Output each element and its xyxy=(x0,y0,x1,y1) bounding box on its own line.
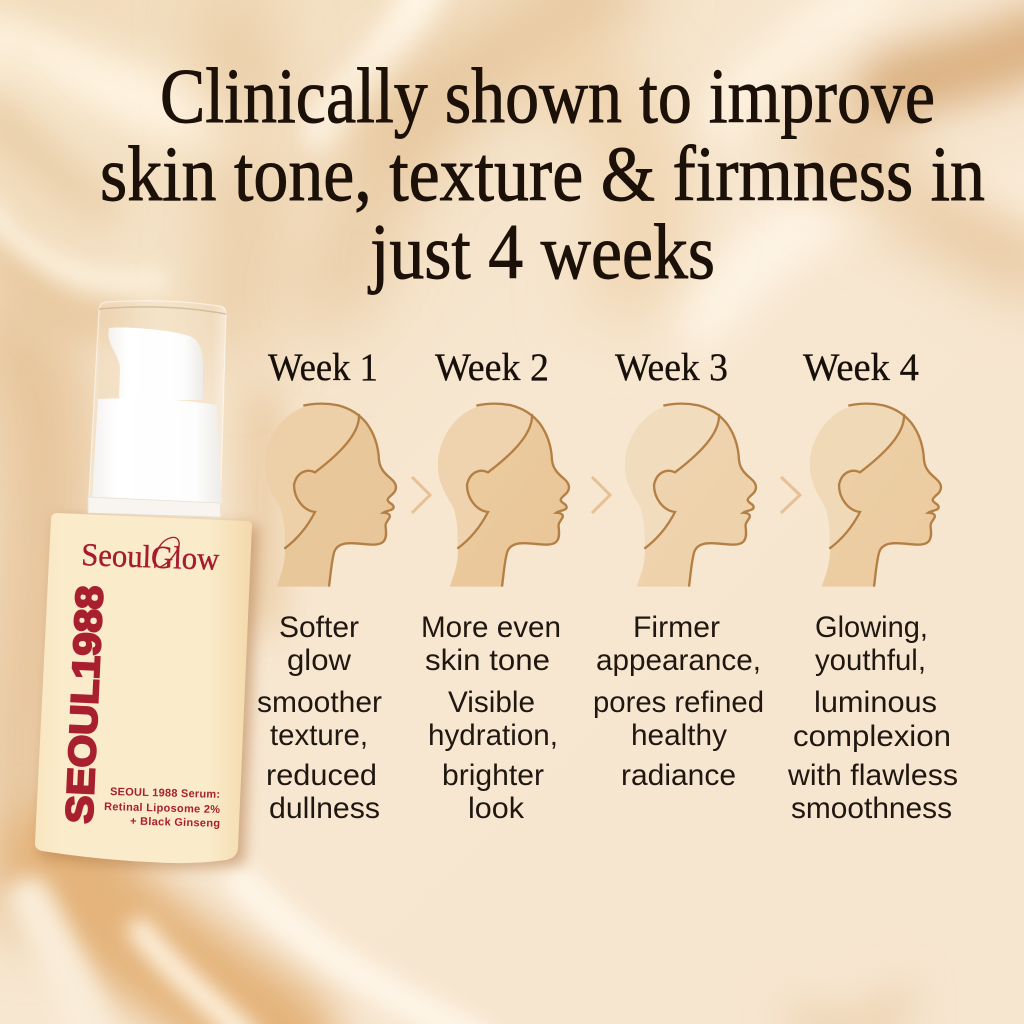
week 3 text: Firmer xyxy=(633,611,720,644)
week 1 text: Softer xyxy=(279,611,359,644)
week 3 face xyxy=(625,404,756,587)
week 2 text: look xyxy=(468,792,525,825)
week 2 label: Week 2 xyxy=(435,346,549,389)
week 3 text: radiance xyxy=(621,759,736,792)
week 1 label: Week 1 xyxy=(268,346,378,389)
week 1 text: smoother xyxy=(257,686,382,719)
arrow 1 xyxy=(412,477,430,513)
product description xyxy=(104,786,220,830)
week 1 text: texture, xyxy=(270,719,368,752)
product description: Retinal Liposome 2% xyxy=(104,801,220,816)
bottle body xyxy=(35,513,252,863)
week 4 text: smoothness xyxy=(791,792,952,825)
title xyxy=(100,52,985,295)
week 2 text: hydration, xyxy=(428,719,558,752)
bottle shadow xyxy=(40,518,258,868)
week 4 label: Week 4 xyxy=(803,346,919,389)
week 3 text: appearance, xyxy=(596,644,761,677)
title: just 4 weeks xyxy=(367,208,715,295)
week 2 text: More even xyxy=(421,611,561,644)
product bottle xyxy=(35,301,258,868)
week 4 text: complexion xyxy=(793,720,951,753)
brand logo: SeoulGlow xyxy=(81,536,220,577)
week 4 text: Glowing, xyxy=(815,611,928,644)
pump collar xyxy=(92,398,222,503)
week 1 text: reduced xyxy=(266,759,377,792)
week 2 column xyxy=(421,346,569,825)
week 3 text: pores refined xyxy=(593,686,764,719)
week 1 text: dullness xyxy=(269,792,380,825)
week 3 label: Week 3 xyxy=(615,346,728,389)
week 2 face xyxy=(438,404,569,587)
product description: + Black Ginseng xyxy=(130,816,220,830)
vertical brand text: SEOUL1988 xyxy=(59,585,112,824)
week 4 face xyxy=(810,404,941,587)
week 4 text: with flawless xyxy=(787,759,958,792)
week 4 text: luminous xyxy=(814,686,937,719)
arrow 2 xyxy=(592,477,610,513)
week 1 text xyxy=(257,611,382,825)
week 1 text: glow xyxy=(287,644,351,677)
title: Clinically shown to improve xyxy=(160,52,935,139)
week 3 text xyxy=(593,611,764,792)
week 1 column xyxy=(257,346,396,825)
product description: SEOUL 1988 Serum: xyxy=(110,786,220,801)
arrow 3 xyxy=(781,477,800,513)
week 1 face xyxy=(265,404,396,587)
week 2 text: Visible xyxy=(448,686,535,719)
week 4 text: youthful, xyxy=(815,644,926,677)
week 4 text xyxy=(787,611,958,825)
collar ring xyxy=(88,497,221,517)
clear cap xyxy=(88,301,226,517)
week 4 column xyxy=(787,346,958,825)
week 2 text xyxy=(421,611,561,825)
week 2 text: brighter xyxy=(442,759,544,792)
week 3 text: healthy xyxy=(631,719,727,752)
week 2 text: skin tone xyxy=(425,644,550,677)
week 3 column xyxy=(593,346,764,792)
pump nozzle xyxy=(109,327,203,400)
